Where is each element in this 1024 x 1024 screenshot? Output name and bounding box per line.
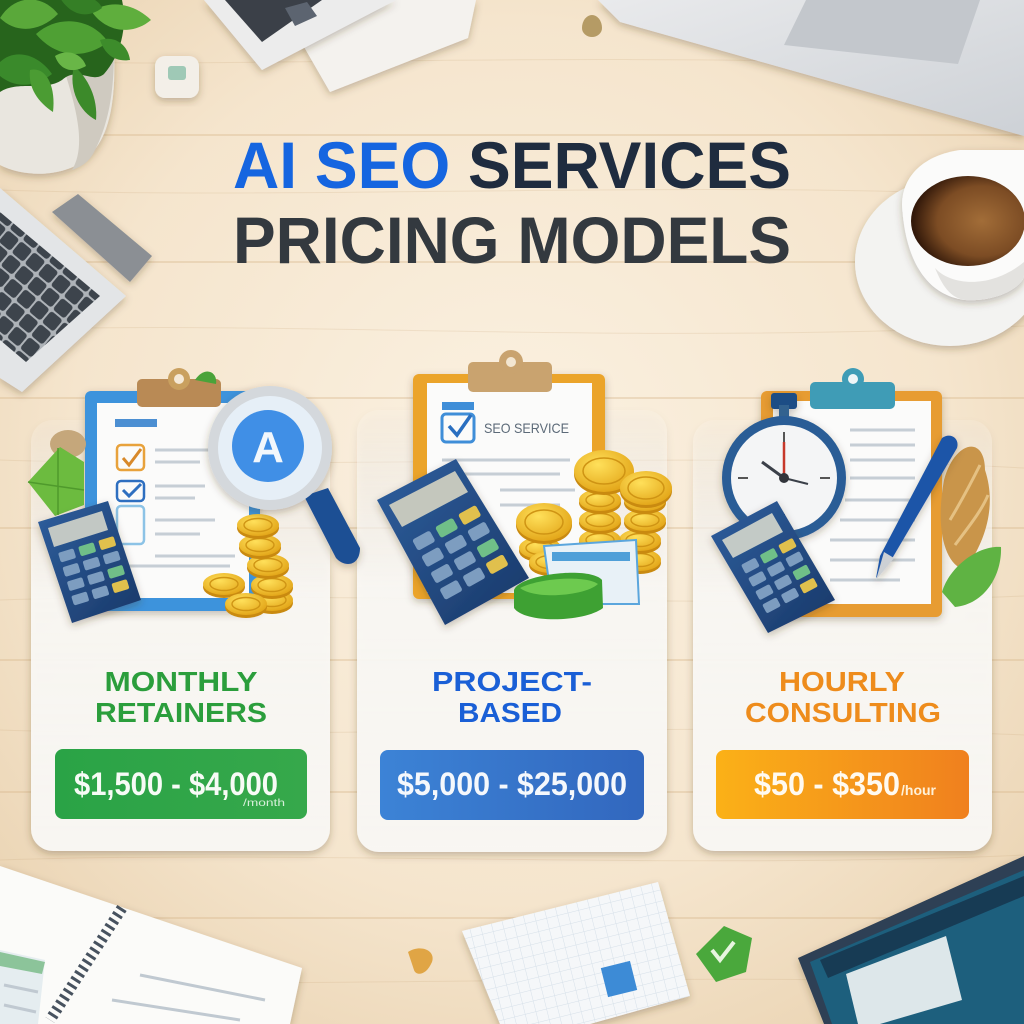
heading	[745, 666, 941, 728]
title: PRICING MODELS	[233, 203, 791, 277]
price badge: $1,500 - $4,000	[74, 766, 278, 802]
green badge	[696, 926, 752, 982]
price badge	[55, 749, 307, 819]
illustration: magnifying glass	[208, 386, 360, 564]
potted plant	[0, 0, 151, 174]
spiral notebook	[0, 866, 302, 1024]
heading: CONSULTING	[745, 697, 941, 728]
card background	[693, 420, 992, 851]
title	[233, 128, 791, 277]
top keyboard and notepad	[204, 0, 476, 92]
heading: HOURLY	[779, 666, 905, 697]
heading	[95, 666, 267, 728]
heading: PROJECT-	[432, 666, 592, 697]
small gold pin	[582, 15, 602, 37]
heading: MONTHLY	[104, 666, 258, 697]
heading	[432, 666, 592, 728]
illustration: card and green bill	[514, 540, 639, 619]
card background	[31, 420, 330, 851]
heading: RETAINERS	[95, 697, 267, 728]
price badge	[716, 750, 969, 819]
panel: monthly retainers	[28, 368, 360, 851]
illustration: clipboard: SEO SERVICE	[484, 420, 569, 436]
illustration: coin stack	[203, 514, 293, 618]
price badge: $50 - $350	[754, 766, 900, 802]
top right laptop	[598, 0, 1024, 136]
illustration: clipboard	[413, 350, 605, 599]
illustration: nut and leaf	[941, 447, 1001, 607]
title: AI SEO SERVICES	[233, 128, 791, 202]
white cube ornament	[155, 56, 199, 98]
panel: hourly consulting	[693, 368, 1001, 851]
illustration: calculator	[711, 501, 835, 633]
small gold ornament	[408, 948, 433, 974]
illustration: coin stacks	[516, 450, 672, 576]
panel: project-based	[357, 350, 672, 852]
price badge	[380, 750, 644, 820]
illustration: clipboard	[28, 368, 260, 611]
illustration: clipboard	[761, 368, 942, 617]
illustration: calculator	[377, 459, 529, 625]
leaves	[50, 430, 86, 458]
price badge: $5,000 - $25,000	[397, 766, 627, 802]
price badge: /hour	[901, 782, 937, 798]
tablet	[798, 856, 1024, 1024]
graph paper	[462, 882, 690, 1024]
illustration: stopwatch	[722, 393, 846, 540]
heading: BASED	[458, 697, 562, 728]
illustration: calculator	[38, 501, 141, 623]
left keyboard	[0, 188, 152, 392]
coffee cup and saucer	[855, 150, 1024, 346]
illustration: magnifying glass: A	[252, 423, 284, 472]
price badge: /month	[243, 798, 285, 809]
card background	[357, 410, 667, 852]
illustration: pen	[876, 436, 958, 580]
